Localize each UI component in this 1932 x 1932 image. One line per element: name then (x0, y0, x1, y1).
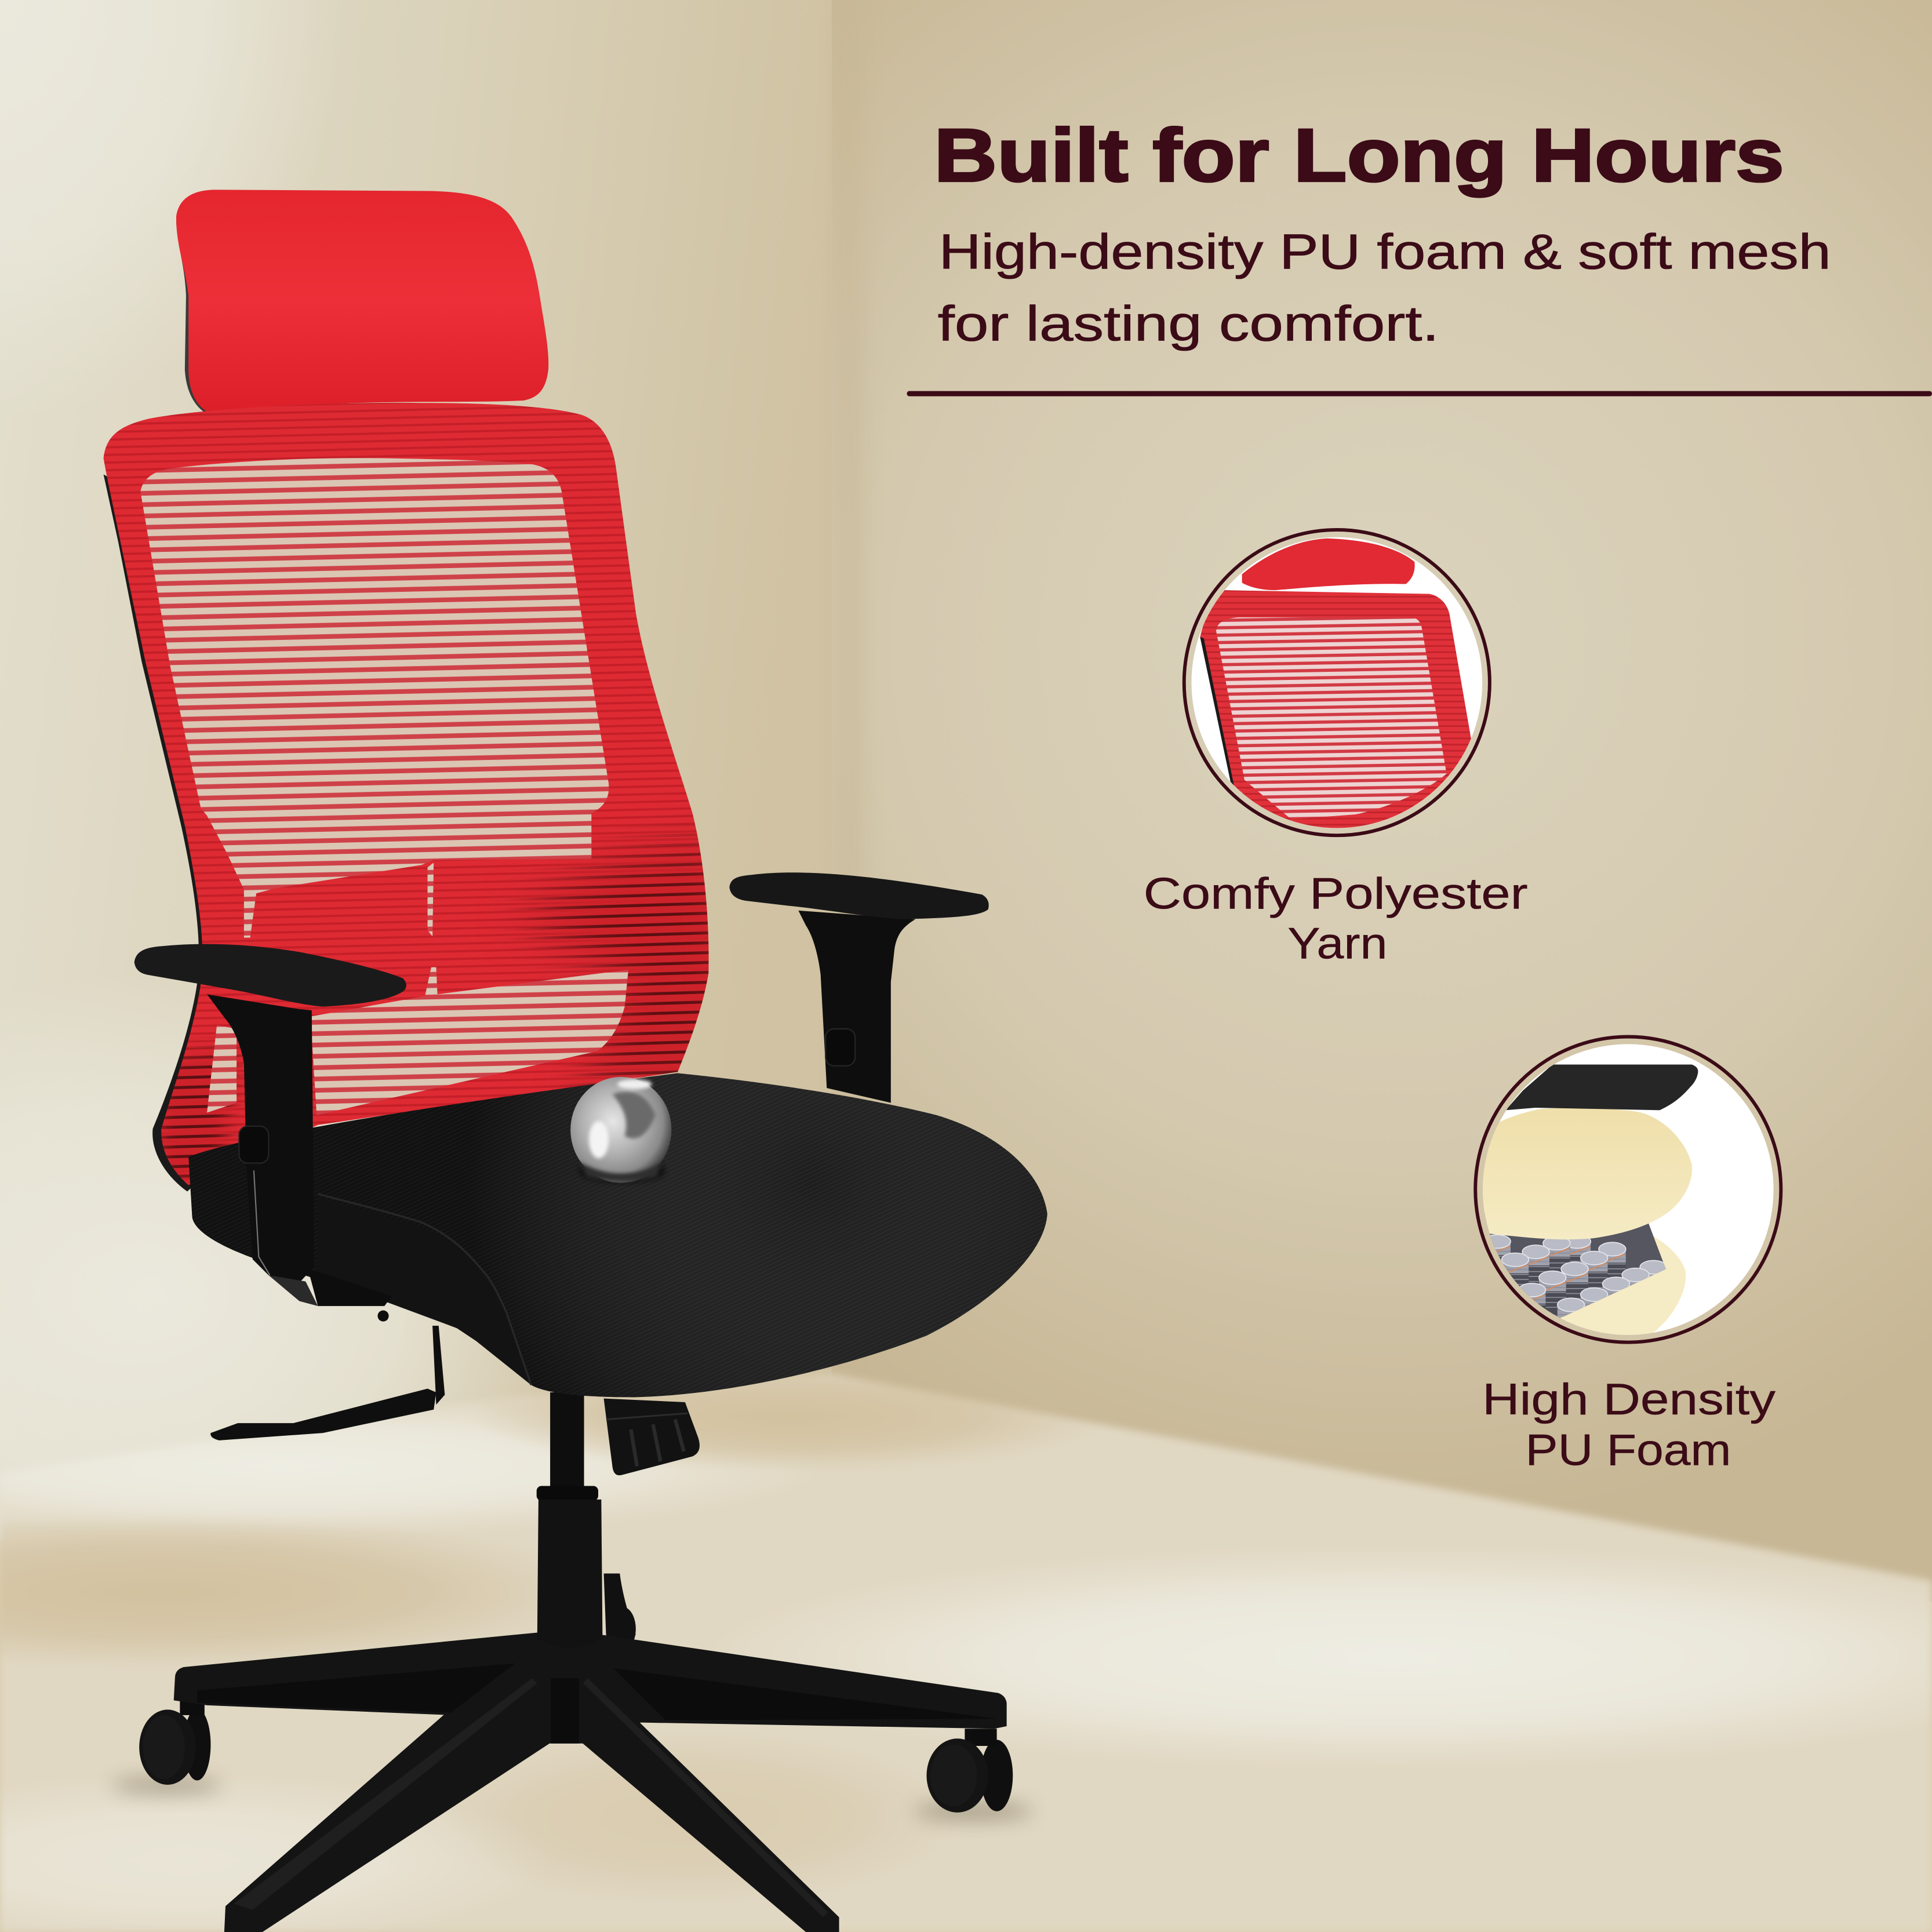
label: PU foam: High Density (1482, 1375, 1776, 1424)
label: polyester yarn (1144, 869, 1528, 969)
seat side panel (318, 1198, 531, 1385)
backrest red mesh (104, 403, 709, 1185)
right wall (832, 0, 1932, 1602)
back caster and leg (604, 1573, 636, 1651)
foam and springs close-up (1472, 1065, 1698, 1349)
arm pad (729, 872, 989, 919)
left wall (0, 0, 832, 1540)
lumbar gap (428, 863, 434, 936)
headrest (176, 190, 548, 414)
five-star base (174, 1632, 1007, 1932)
left armrest (134, 944, 406, 1306)
chair (104, 190, 1047, 1932)
subheading: for lasting comfort. (938, 297, 1439, 352)
right armrest (729, 872, 989, 1103)
gas column (537, 1392, 602, 1648)
wall corner shading (833, 0, 865, 1392)
floor (0, 1355, 1932, 1932)
tilt knob (604, 1399, 700, 1475)
arm pad (134, 944, 406, 1007)
callout: polyester yarn (1184, 530, 1490, 863)
callout: PU foam (1472, 1037, 1781, 1349)
circle badge (1184, 530, 1490, 835)
subheading: High-density PU foam & soft mesh (939, 224, 1831, 279)
heading: Built for Long Hours (934, 114, 1784, 197)
label: polyester yarn: Yarn (1287, 919, 1387, 969)
height button (239, 1126, 268, 1163)
leg panels (197, 1664, 515, 1713)
right caster (926, 1729, 1013, 1813)
mesh backrest (104, 403, 709, 1191)
left caster (139, 1698, 210, 1785)
lower breathable panel (311, 970, 628, 1115)
header divider (907, 391, 1932, 396)
arm post (207, 994, 314, 1283)
label: polyester yarn: Comfy Polyester (1144, 869, 1528, 919)
label: PU foam: PU Foam (1526, 1425, 1731, 1475)
chrome ball (570, 1077, 671, 1183)
seat cushion (188, 1073, 1047, 1397)
label: PU foam (1482, 1375, 1776, 1475)
seat lever (210, 1326, 445, 1440)
circle badge (1475, 1037, 1781, 1342)
arm post (798, 911, 915, 1103)
caster shadows (111, 1778, 1032, 1820)
backrest frame edge (104, 474, 216, 1191)
height button (825, 1029, 855, 1066)
upper breathable panel (140, 458, 609, 938)
seat bracket (308, 1269, 392, 1322)
subheading (938, 224, 1831, 352)
darker lower weave (104, 403, 709, 1185)
mesh close-up (1200, 539, 1471, 863)
